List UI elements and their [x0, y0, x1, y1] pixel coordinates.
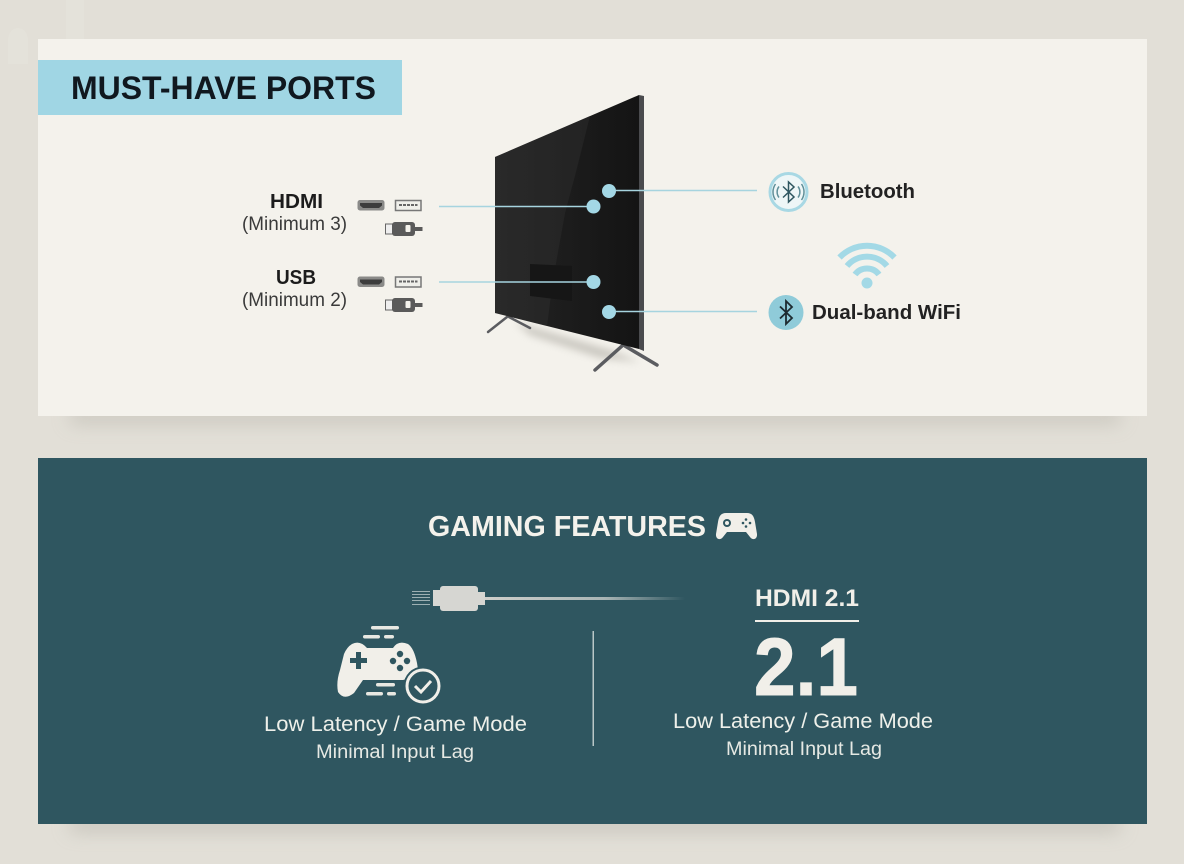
text: right low latency	[673, 709, 933, 760]
heading: gaming features: GAMING FEATURES	[428, 511, 706, 543]
callout: HDMI 2.1	[754, 585, 859, 713]
icon: bluetooth ring	[770, 174, 807, 210]
background decoration	[8, 0, 84, 64]
icon: game controller with check	[337, 626, 442, 706]
heading: must-have ports	[38, 60, 402, 115]
icon: small controller	[716, 513, 757, 539]
connector dots	[586, 184, 616, 319]
text: right low latency: Minimal Input Lag	[726, 739, 882, 760]
icon: wifi	[840, 246, 894, 288]
panel shadow: gaming	[70, 816, 1120, 832]
icon: HDMI row ports	[358, 200, 422, 236]
label: HDMI minimum 3: HDMI	[270, 191, 323, 213]
label: Dual-band WiFi: Dual-band WiFi	[812, 302, 961, 324]
icon: bluetooth badge	[768, 295, 804, 330]
illustration: television	[488, 95, 657, 370]
text: right low latency: Low Latency / Game Mode	[673, 709, 933, 733]
connector lines	[439, 190, 757, 312]
label: USB minimum 2: (Minimum 2)	[242, 290, 347, 311]
label: USB minimum 2: USB	[276, 267, 316, 289]
text: left low latency: Minimal Input Lag	[316, 742, 474, 763]
label: HDMI minimum 3: (Minimum 3)	[242, 214, 347, 235]
panel: must-have ports	[38, 39, 1147, 416]
callout: HDMI 2.1: 2.1	[754, 622, 858, 713]
heading: must-have ports: MUST-HAVE PORTS	[71, 70, 376, 106]
icon: HDMI cable	[412, 586, 685, 611]
text: left low latency: Low Latency / Game Mode	[264, 712, 527, 736]
callout: HDMI 2.1: HDMI 2.1	[755, 585, 859, 612]
label: HDMI minimum 3	[242, 191, 347, 235]
label: USB minimum 2	[242, 267, 347, 311]
panel shadow: ports	[70, 408, 1120, 424]
text: left low latency	[264, 712, 527, 763]
icon: USB row ports	[358, 276, 422, 312]
divider	[592, 631, 594, 746]
panel: gaming features	[38, 458, 1147, 824]
label: Bluetooth: Bluetooth	[820, 181, 915, 203]
